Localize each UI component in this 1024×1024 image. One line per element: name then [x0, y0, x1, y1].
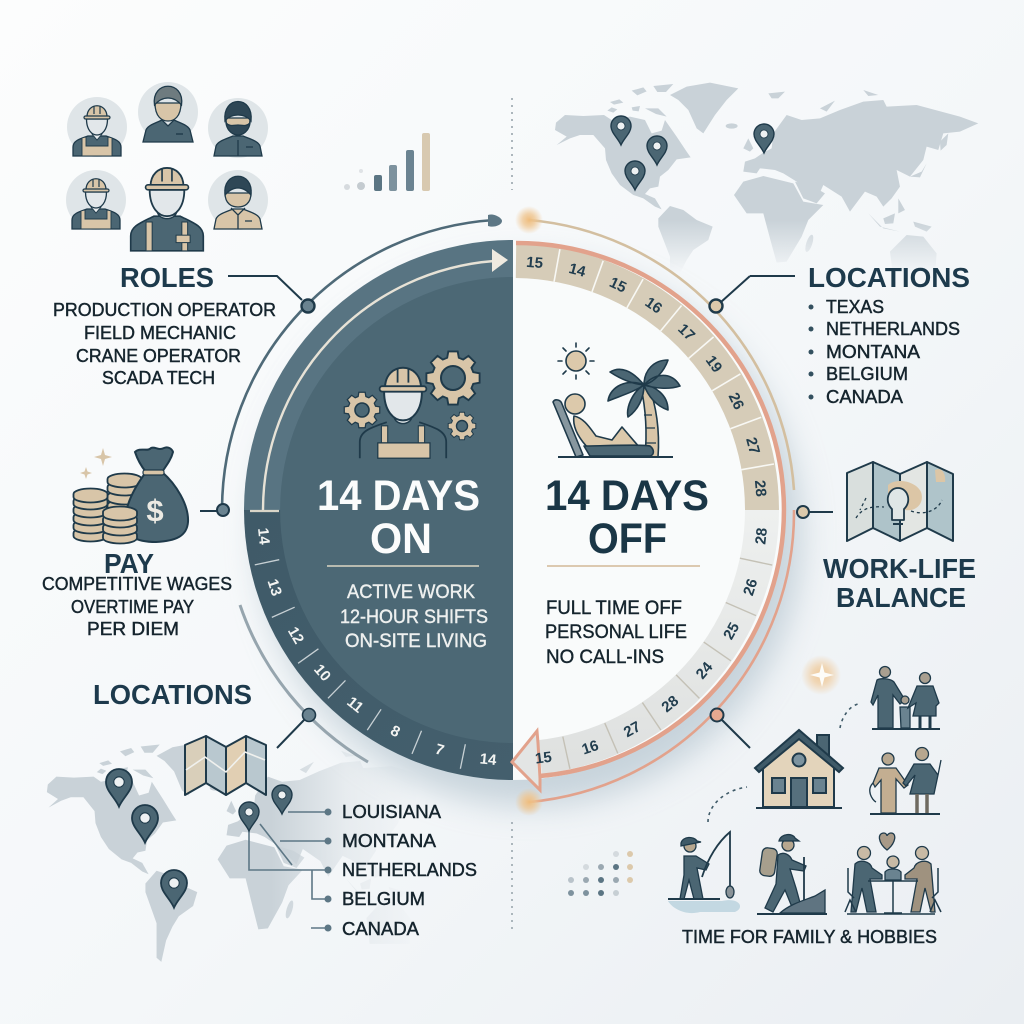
day numbers: 27	[742, 436, 763, 456]
role list	[53, 300, 276, 388]
day numbers: 16	[580, 737, 601, 758]
heading	[823, 553, 976, 613]
half disc	[244, 240, 513, 510]
arrow head	[512, 731, 540, 790]
heading: LOCATIONS	[808, 262, 970, 293]
day numbers: 28	[752, 527, 771, 545]
day numbers: 15	[534, 749, 553, 768]
location list: MONTANA	[826, 342, 920, 362]
world map bottom left	[47, 743, 451, 962]
text block: ACTIVE WORK	[347, 582, 475, 603]
panel: 14 days on: ON	[370, 515, 432, 563]
panel: 14 days on: 7	[433, 741, 446, 759]
text block	[545, 598, 687, 668]
day numbers: 16	[642, 294, 665, 317]
white half disc	[513, 240, 783, 780]
day numbers	[526, 254, 771, 768]
callout connectors	[200, 276, 833, 748]
pay list: PER DIEM	[87, 619, 179, 639]
heading: WORK-LIFE	[823, 553, 976, 584]
day numbers: 26	[740, 577, 761, 598]
sparkle	[801, 655, 841, 695]
panel: 14 days on	[244, 240, 513, 780]
panel: 14 days on: 13	[264, 577, 285, 598]
location list: MONTANA	[342, 831, 436, 851]
rule	[547, 565, 700, 567]
text block	[340, 582, 488, 652]
icon: fishing	[668, 832, 740, 913]
heading: LOCATIONS	[93, 679, 252, 710]
divider dotted top	[511, 98, 513, 190]
icon: relaxing under palm	[553, 343, 680, 457]
panel: 14 days on: 10	[310, 661, 334, 685]
icon: folded map with bulb	[847, 462, 953, 541]
location list: LOUISIANA	[342, 802, 441, 822]
location list: BELGIUM	[342, 889, 425, 909]
day numbers: 28	[658, 692, 682, 716]
heading: 14 DAYS	[545, 472, 709, 520]
role list: FIELD MECHANIC	[84, 323, 236, 343]
heading: PAY	[104, 548, 154, 579]
heading: BALANCE	[836, 582, 966, 613]
text block: 12-HOUR SHIFTS	[340, 607, 488, 628]
circle shadow	[258, 262, 802, 806]
panel: roles	[53, 82, 276, 388]
panel: 14 days on: 14	[254, 527, 273, 546]
text block: NO CALL-INS	[546, 647, 664, 668]
icon: dot chart bottom	[568, 851, 633, 896]
panel: locations left	[93, 679, 477, 939]
icon: map pins	[106, 769, 292, 908]
location list: NETHERLANDS	[342, 860, 477, 880]
day numbers: 27	[621, 718, 644, 741]
icon: family at table	[845, 833, 941, 914]
panel: 14 days on: 14	[479, 750, 498, 769]
location list: BELGIUM	[826, 364, 908, 384]
icon: map pins	[611, 116, 774, 190]
role list: PRODUCTION OPERATOR	[53, 300, 276, 320]
panel: 14 days on: 8	[387, 722, 403, 741]
day numbers: 15	[526, 254, 544, 272]
day numbers: 14	[567, 260, 588, 281]
panel: work-life balance	[823, 462, 976, 613]
leader lines	[249, 808, 332, 932]
day numbers: 28	[751, 479, 769, 497]
icon: couple	[870, 748, 941, 814]
day numbers: 25	[720, 620, 743, 643]
day cells	[255, 560, 465, 769]
heading: ROLES	[120, 262, 214, 293]
location list	[342, 802, 477, 939]
role avatars	[66, 82, 268, 251]
icon: hiker	[757, 835, 827, 914]
location list	[808, 297, 960, 407]
panel: 14 days on: 12	[284, 624, 307, 647]
world map top right	[555, 83, 978, 294]
day numbers: 17	[674, 321, 698, 344]
icon: folded map	[185, 736, 266, 795]
day numbers: 26	[725, 390, 747, 413]
text block: PERSONAL LIFE	[545, 622, 687, 643]
day numbers: 19	[702, 352, 725, 376]
salmon rim	[516, 243, 784, 776]
role list: SCADA TECH	[102, 368, 215, 388]
panel: 14 days off: OFF	[588, 515, 667, 563]
day numbers: 24	[693, 658, 717, 683]
rule	[327, 565, 479, 567]
outer timeline arcs	[222, 215, 794, 802]
panel: pay	[42, 447, 232, 639]
heading: 14 DAYS	[317, 472, 480, 520]
panel: 14 days on: 11	[344, 693, 367, 717]
icon: money bag and coins: $	[146, 493, 164, 528]
icon: bar chart top	[344, 133, 430, 191]
sun glows on arc ends	[515, 206, 543, 816]
pay list	[42, 574, 232, 639]
day dividers	[554, 249, 774, 470]
icon: money bag and coins	[74, 447, 188, 544]
icon: house	[755, 730, 843, 808]
text block: FULL TIME OFF	[546, 598, 682, 619]
tan calendar band	[516, 261, 762, 510]
pay list: OVERTIME PAY	[71, 597, 194, 617]
panel: 14 days off	[512, 240, 784, 790]
icon: worker and gears	[344, 351, 480, 458]
caption: TIME FOR FAMILY & HOBBIES	[682, 927, 937, 947]
dashed connectors	[708, 704, 858, 822]
light calendar band	[540, 510, 762, 757]
panel: locations right	[611, 116, 970, 407]
icon: family	[871, 666, 940, 729]
role list: CRANE OPERATOR	[76, 346, 241, 366]
day numbers: 15	[607, 274, 629, 296]
pay list: COMPETITIVE WAGES	[42, 574, 232, 594]
location list: CANADA	[826, 387, 903, 407]
location list: NETHERLANDS	[826, 319, 960, 339]
progress arrow	[250, 249, 508, 511]
location list: CANADA	[342, 919, 419, 939]
text block: ON-SITE LIVING	[345, 631, 487, 652]
location list: TEXAS	[826, 297, 884, 317]
panel: family and hobbies	[668, 655, 941, 947]
